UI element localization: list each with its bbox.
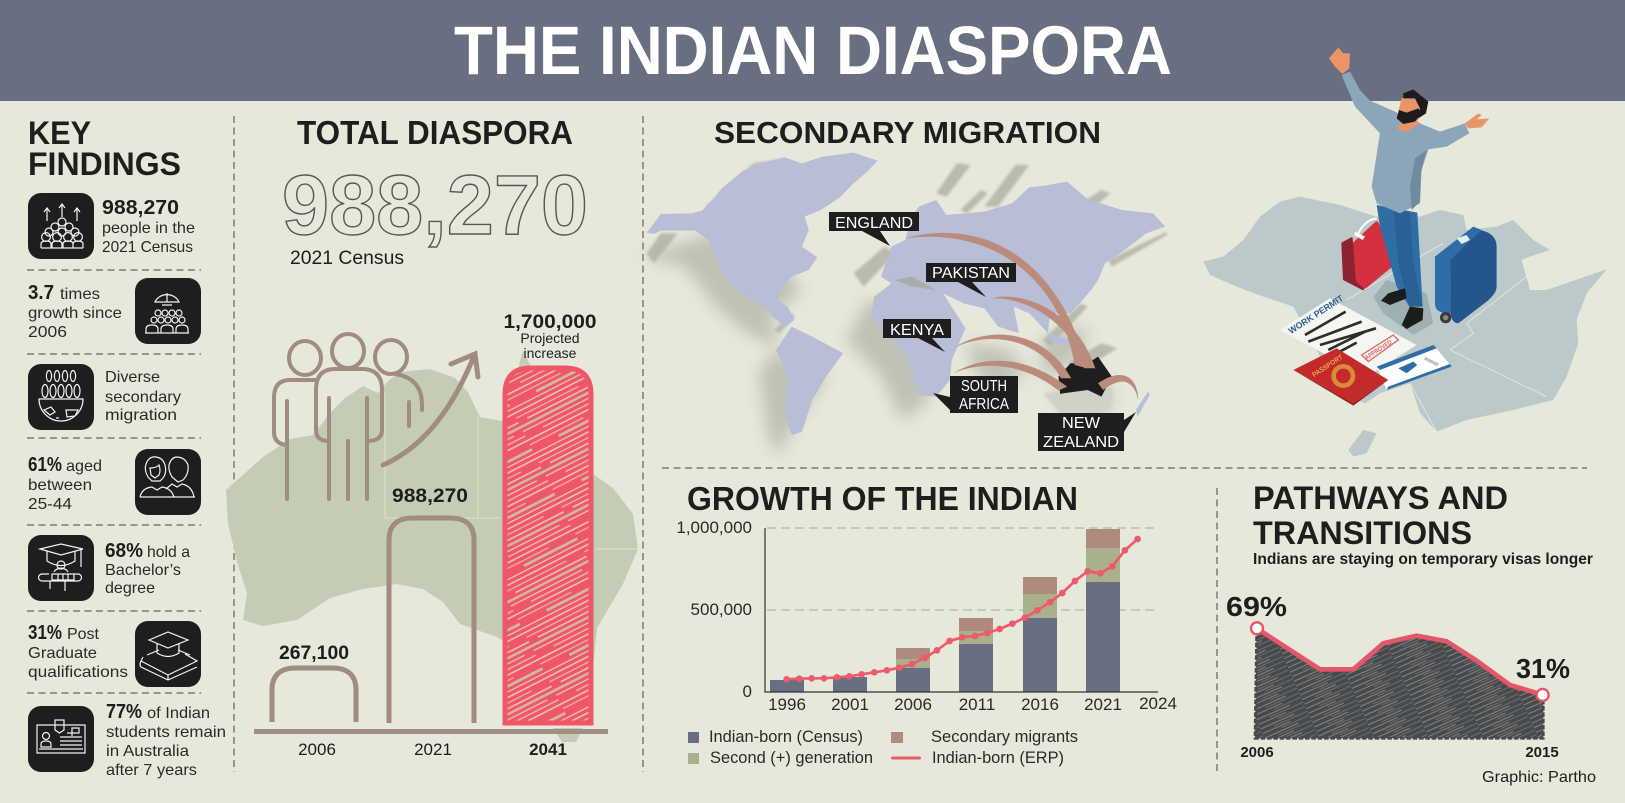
label: new zealand: [1038, 412, 1136, 451]
text: 77% students: of Indian: [147, 705, 210, 722]
text: 988,270 people: [102, 197, 195, 256]
value label: 1,700,000 projected increase: 1,700,000: [504, 312, 596, 333]
text: 988,270 people: people in the: [102, 220, 195, 237]
text: 61% aged: 25-44: [28, 496, 72, 513]
document: passport: PASSPORT: [1311, 354, 1345, 379]
panel: growth of the indian: [676, 480, 1177, 767]
text: diverse secondary migration: secondary: [105, 389, 181, 406]
text: 61% aged: between: [28, 477, 92, 494]
axis labels: [298, 740, 567, 759]
subheading: Indians are staying on temporary visas longer: [1253, 551, 1593, 568]
text: 988,270 people: 2021 Census: [102, 239, 193, 256]
text: 68% bachelor: [105, 540, 190, 597]
axis labels: 2006: [298, 740, 336, 759]
heading: key findings: KEY: [28, 115, 91, 151]
text: 3.7 times growth: [28, 282, 122, 341]
heading: pathways: [1253, 480, 1508, 551]
text: 61% aged: aged: [66, 458, 102, 475]
axis labels: 2021: [414, 740, 452, 759]
heading: key findings: [28, 115, 181, 182]
big outlined number: 988,270: [282, 158, 588, 252]
credit: Graphic: Partho: [1482, 769, 1596, 786]
value label: 988,270: 988,270: [392, 486, 468, 507]
label: kenya: KENYA: [890, 322, 944, 339]
legend: Second (+) generation: [710, 748, 873, 767]
text: 31% post graduate: 31%: [28, 622, 62, 644]
label: england: [829, 212, 919, 246]
y axis labels: 0: [743, 682, 752, 701]
label: england: ENGLAND: [835, 215, 913, 232]
label: kenya: [883, 319, 951, 352]
axis labels: 2041: [529, 740, 567, 759]
illustration: traveller on australia map: [1203, 47, 1607, 457]
panel: total diaspora: [226, 114, 638, 759]
text: 3.7 times growth: times: [60, 286, 100, 303]
year labels: 2015: [1525, 744, 1559, 761]
text: 3.7 times growth: growth since: [28, 305, 122, 322]
bar: 2006: [272, 668, 356, 722]
document: passport: [1293, 348, 1388, 406]
heading: key findings: FINDINGS: [28, 146, 181, 182]
text: 31% post graduate: Post: [67, 626, 100, 643]
legend: Indian-born (Census): [709, 727, 863, 746]
text: 31% post graduate: Graduate: [28, 645, 97, 662]
line: indian-born erp: [783, 536, 1141, 683]
text: 31% post graduate: qualifications: [28, 664, 128, 681]
icon: people on globe: [28, 364, 94, 430]
text: 68% bachelor: 68%: [105, 540, 143, 562]
heading: pathways: PATHWAYS AND: [1253, 480, 1508, 516]
heading: pathways: TRANSITIONS: [1253, 515, 1472, 551]
x axis labels: 2021: [1084, 695, 1122, 714]
panel: pathways and transitions: [1226, 480, 1596, 786]
document: work permit: WORK PERMIT: [1287, 293, 1346, 336]
x axis labels: [768, 694, 1177, 714]
heading: secondary migration: SECONDARY MIGRATION: [714, 115, 1101, 150]
value label: 1,700,000 projected increase: increase: [524, 345, 577, 361]
suitcase: red: [1342, 218, 1393, 289]
y axis labels: 1,000,000: [676, 518, 752, 537]
y axis labels: 500,000: [691, 600, 752, 619]
x axis labels: 2006: [894, 695, 932, 714]
x axis labels: 1996: [768, 695, 806, 714]
bar: 2021: [389, 518, 474, 723]
value label: 1,700,000 projected increase: Projected: [520, 330, 580, 346]
arrows: migration flows: [905, 233, 1138, 400]
text: 77% students: [106, 701, 226, 779]
map: australia isometric: [1203, 197, 1607, 457]
label: pakistan: [926, 263, 1016, 297]
panel: secondary migration: [642, 115, 1167, 457]
label: south africa: AFRICA: [959, 396, 1009, 413]
value label: 31%: 31%: [1516, 653, 1570, 684]
text: 61% aged: 61%: [28, 454, 62, 476]
axis baseline: [254, 729, 608, 734]
stacked bars: [770, 529, 1120, 692]
text: 3.7 times growth: 3.7: [28, 282, 54, 304]
label: south africa: SOUTH: [961, 378, 1007, 395]
text: 61% aged: [28, 454, 102, 513]
icon: id card: [28, 706, 94, 772]
text: 31% post graduate: [28, 622, 128, 681]
map: australia backdrop: [226, 350, 638, 742]
text: 77% students: students remain: [106, 724, 226, 741]
icon: gauge over crowd: [135, 278, 201, 344]
text: 77% students: in Australia: [106, 743, 189, 760]
x axis labels: 2024: [1139, 694, 1177, 713]
world map: [642, 153, 1167, 457]
label: pakistan: PAKISTAN: [932, 265, 1010, 282]
area chart: [1251, 622, 1549, 738]
text: diverse secondary migration: [105, 369, 181, 424]
text: diverse secondary migration: migration: [105, 407, 177, 424]
document: work permit: [1280, 293, 1417, 377]
value label: 1,700,000 projected increase: [504, 312, 596, 361]
heading: growth: GROWTH OF THE INDIAN: [687, 480, 1078, 517]
text: 68% bachelor: degree: [105, 580, 155, 597]
title: THE INDIAN DIASPORA: [454, 12, 1172, 89]
legend: Indian-born (ERP): [932, 748, 1064, 767]
label: new zealand: ZEALAND: [1043, 434, 1119, 451]
panel: key findings: [27, 115, 226, 779]
year labels: 2006: [1240, 744, 1274, 761]
shadow under feet: [1373, 280, 1433, 335]
document: boarding pass: [1377, 345, 1452, 390]
x axis labels: 2001: [831, 695, 869, 714]
text: 3.7 times growth: 2006: [28, 324, 67, 341]
x axis labels: 2016: [1021, 695, 1059, 714]
destination: australia: [1058, 357, 1112, 397]
icon: graduation cap and diploma: [28, 535, 94, 601]
header band: [0, 0, 1625, 101]
value label: 267,100: 267,100: [279, 643, 349, 664]
text: 77% students: 77%: [106, 701, 142, 723]
caption: 2021 census: 2021 Census: [290, 248, 404, 269]
text: 77% students: after 7 years: [106, 762, 197, 779]
label: south africa: [933, 376, 1018, 413]
x axis labels: 2011: [959, 695, 995, 714]
text: 988,270 people: 988,270: [102, 197, 179, 219]
icon: crowd with arrows: [28, 193, 94, 259]
heading: total diaspora: TOTAL DIASPORA: [297, 114, 573, 151]
bar: 2041 projected: [505, 368, 591, 723]
icon: three people with arrow: [274, 334, 478, 499]
stamp: approved: APPROVED: [1364, 339, 1394, 362]
icon: book with cap: [135, 621, 201, 687]
icon: two young adults: [135, 449, 201, 515]
legend: Secondary migrants: [931, 727, 1078, 746]
value label: 69%: 69%: [1226, 591, 1287, 622]
y axis labels: [676, 518, 752, 701]
year labels: [1240, 744, 1559, 761]
text: diverse secondary migration: Diverse: [105, 369, 160, 386]
text: 68% bachelor: hold a: [147, 544, 190, 561]
bar chart: diaspora growth: [254, 312, 608, 759]
suitcase: blue: [1435, 227, 1497, 323]
figure: man with raised arms: [1329, 47, 1489, 329]
legend: [688, 727, 1078, 767]
text: 68% bachelor: Bachelor’s: [105, 562, 181, 579]
label: new zealand: NEW: [1062, 415, 1101, 432]
